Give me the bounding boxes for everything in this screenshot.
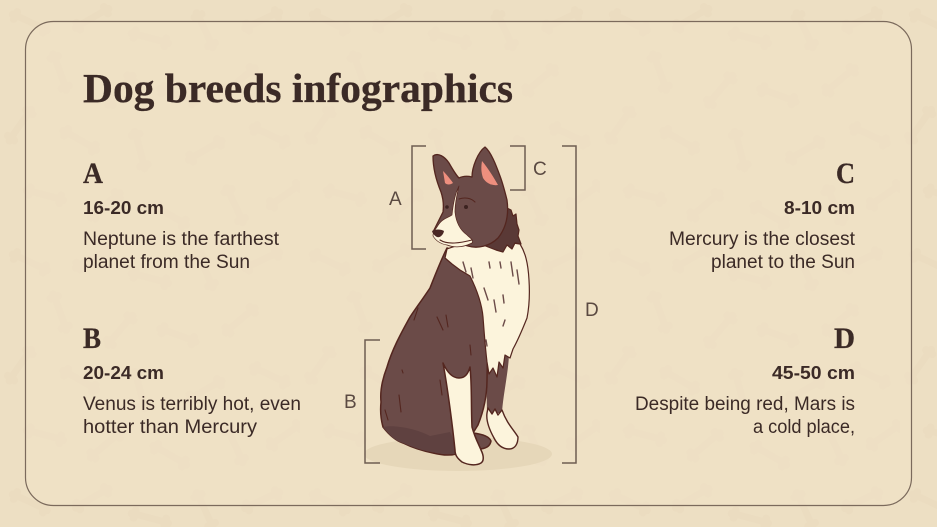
chest white bbox=[445, 241, 529, 377]
text block: A: Neptune is the farthest bbox=[83, 229, 280, 250]
text block: D bbox=[635, 322, 855, 438]
dog illustration bbox=[381, 147, 529, 465]
rear leg right bbox=[486, 355, 509, 413]
ear inner left bbox=[443, 171, 453, 184]
text block: A: planet from the Sun bbox=[83, 252, 250, 273]
text block: C: C bbox=[836, 157, 855, 190]
text block: D: Despite being red, Mars is bbox=[635, 394, 855, 415]
bracket A: A bbox=[389, 189, 402, 210]
text block: C: Mercury is the closest bbox=[669, 229, 856, 250]
haunch shade bbox=[383, 426, 456, 454]
muzzle and blaze bbox=[433, 186, 473, 247]
chest fur flecks bbox=[463, 262, 519, 346]
bracket C bbox=[510, 146, 547, 190]
text block: B bbox=[83, 322, 301, 438]
text block: C: 8-10 cm bbox=[784, 198, 855, 218]
text block: A: 16-20 cm bbox=[83, 198, 164, 218]
body bbox=[381, 248, 488, 455]
text block: D: a cold place, bbox=[753, 417, 855, 438]
bracket B bbox=[344, 340, 380, 463]
mouth line bbox=[440, 240, 472, 243]
ground shadow bbox=[364, 437, 552, 471]
hind paw far side bbox=[462, 425, 491, 449]
front leg white bbox=[443, 363, 483, 465]
text block: A: A bbox=[83, 157, 103, 190]
text block: B: 20-24 cm bbox=[83, 363, 164, 383]
mane bbox=[470, 195, 521, 252]
text block: B: B bbox=[83, 322, 101, 355]
text block: D: D bbox=[834, 322, 855, 355]
body fur marks bbox=[385, 308, 471, 420]
text block: A bbox=[83, 157, 280, 273]
text block: C: planet to the Sun bbox=[711, 252, 855, 273]
eyes bbox=[445, 198, 475, 209]
bracket D bbox=[562, 146, 599, 463]
bracket D: D bbox=[585, 300, 599, 321]
text block: B: hotter than Mercury bbox=[83, 417, 258, 438]
nose bbox=[432, 230, 444, 237]
text block: C bbox=[669, 157, 856, 273]
bracket B: B bbox=[344, 392, 357, 413]
text block: D: 45-50 cm bbox=[772, 363, 855, 383]
title: Dog breeds infographics bbox=[83, 65, 513, 111]
skull and ears bbox=[433, 147, 508, 247]
text block: B: Venus is terribly hot, even bbox=[83, 394, 301, 415]
bracket C: C bbox=[533, 159, 547, 180]
rear paw bbox=[487, 408, 518, 449]
ear inner right bbox=[481, 161, 498, 185]
head bbox=[432, 147, 521, 252]
bracket A bbox=[389, 146, 426, 249]
